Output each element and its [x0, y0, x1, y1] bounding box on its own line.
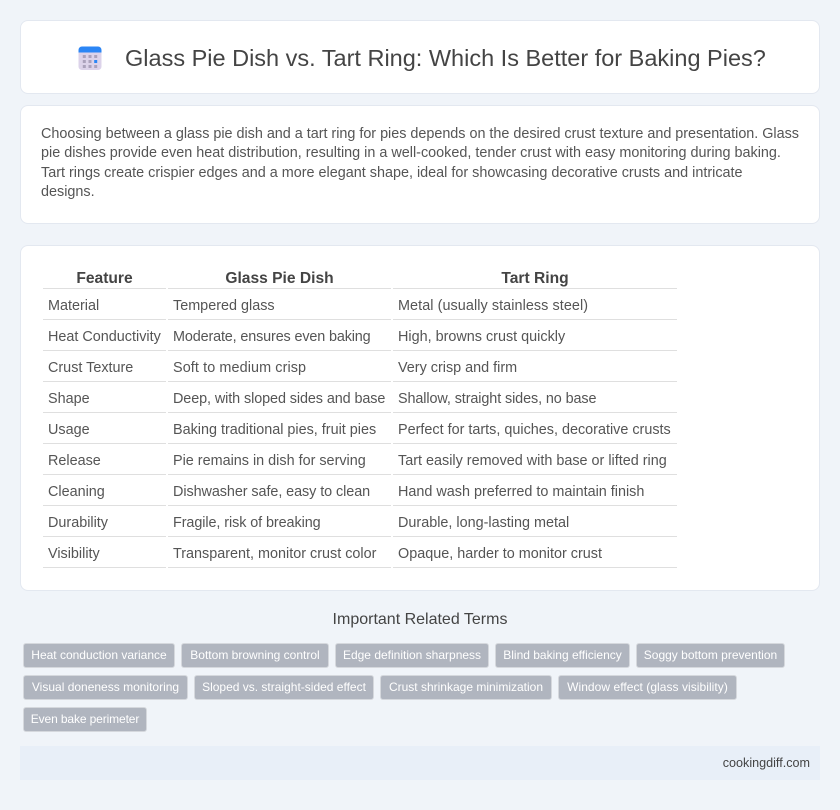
panel: title header [20, 20, 820, 94]
row: material [43, 298, 677, 320]
row: heat conductivity: Heat Conductivity [48, 329, 161, 345]
row: visibility: Visibility [48, 546, 100, 562]
heading: important related terms: Important Related Terms [333, 611, 507, 628]
row: shape [43, 391, 677, 413]
row: release: Pie remains in dish for serving [173, 453, 366, 469]
row: usage: Baking traditional pies, fruit pies [173, 422, 376, 438]
intro text: Choosing between a glass pie dish and a tart ring for pies depends on the desired crust texture and presentation. Glass [41, 126, 799, 142]
row: durability: Durability [48, 515, 108, 531]
row: visibility: Transparent, monitor crust color [173, 546, 376, 562]
table header [43, 270, 677, 289]
table header: Feature [76, 270, 133, 287]
related terms chips: Bottom browning control [190, 648, 320, 662]
related terms chips: Heat conduction variance [31, 648, 167, 662]
row: durability: Fragile, risk of breaking [173, 515, 321, 531]
comparison table [43, 270, 677, 568]
row: shape: Shape [48, 391, 90, 407]
title: Glass Pie Dish vs. Tart Ring: Which Is Better for Baking Pies? [125, 45, 766, 71]
intro text: pie dishes provide even heat distribution, resulting in a well-cooked, tender crust with easy monitoring during baking. [41, 145, 781, 161]
row: cleaning: Dishwasher safe, easy to clean [173, 484, 370, 500]
table header: Tart Ring [501, 270, 569, 287]
row: release: Tart easily removed with base or lifted ring [398, 453, 667, 469]
intro text [41, 126, 799, 200]
row: cleaning [43, 484, 677, 506]
intro text: designs. [41, 184, 95, 200]
icon: calendar [78, 46, 102, 70]
row: release [43, 453, 677, 475]
row: visibility [43, 546, 677, 568]
related terms chips: Visual doneness monitoring [32, 680, 179, 694]
row: shape: Shallow, straight sides, no base [398, 391, 596, 407]
row: crust texture: Very crisp and firm [398, 360, 517, 376]
table header: Glass Pie Dish [225, 270, 334, 287]
row: usage [43, 422, 677, 444]
row: heat conductivity: Moderate, ensures even baking [173, 329, 371, 345]
row: crust texture: Crust Texture [48, 360, 133, 376]
footer source text: cookingdiff.com [723, 756, 810, 770]
panel: comparison table [20, 245, 820, 591]
row: crust texture [43, 360, 677, 382]
row: material: Tempered glass [173, 298, 275, 314]
related terms chips: Crust shrinkage minimization [389, 680, 543, 694]
row: durability: Durable, long-lasting metal [398, 515, 569, 531]
related terms chips: Window effect (glass visibility) [567, 680, 728, 694]
related terms chips: Edge definition sharpness [343, 648, 481, 662]
row: durability [43, 515, 677, 537]
row: heat conductivity: High, browns crust quickly [398, 329, 565, 345]
row: release: Release [48, 453, 101, 469]
row: material: Material [48, 298, 99, 314]
related terms chips: Blind baking efficiency [503, 648, 622, 662]
row: heat conductivity [43, 329, 677, 351]
related terms chips: Even bake perimeter [31, 712, 139, 726]
related terms chips [23, 643, 785, 732]
related terms chips: Sloped vs. straight-sided effect [202, 680, 366, 694]
row: usage: Perfect for tarts, quiches, decorative crusts [398, 422, 671, 438]
row: visibility: Opaque, harder to monitor crust [398, 546, 602, 562]
intro text: Tart rings create crispier edges and a more elegant shape, ideal for showcasing decorative crusts and intricate [41, 165, 743, 181]
row: cleaning: Cleaning [48, 484, 105, 500]
panel: introduction [20, 105, 820, 224]
row: crust texture: Soft to medium crisp [173, 360, 306, 376]
related terms chips: Soggy bottom prevention [644, 648, 777, 662]
row: usage: Usage [48, 422, 90, 438]
row: material: Metal (usually stainless steel) [398, 298, 588, 314]
row: cleaning: Hand wash preferred to maintain finish [398, 484, 644, 500]
row: shape: Deep, with sloped sides and base [173, 391, 385, 407]
footer bar [20, 746, 820, 780]
